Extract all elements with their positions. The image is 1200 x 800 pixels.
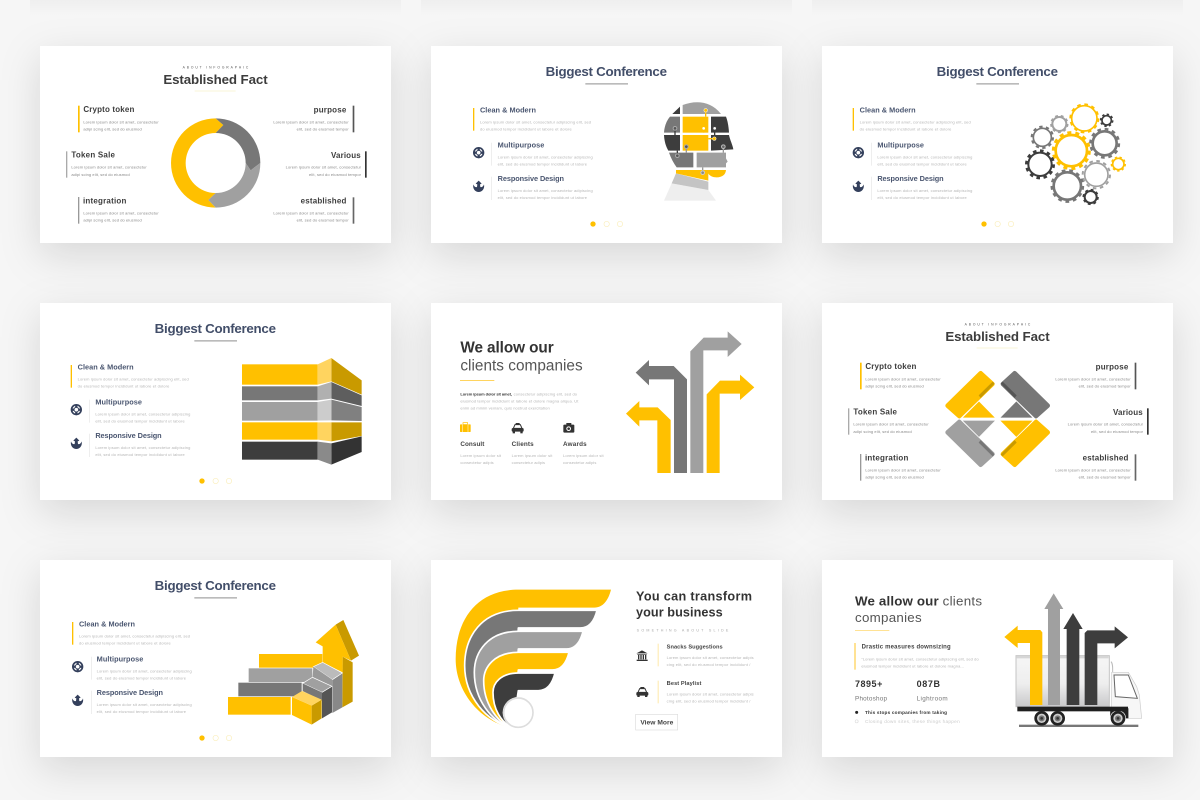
item: clean and modern: do eiusmod tempor incididunt ut labore et dolore (480, 127, 572, 132)
item: responsive design: Lorem ipsum dolor sit amet, consectetur adipiscing (95, 445, 190, 450)
icon: camera (563, 423, 574, 433)
item: token sale: Token Sale (71, 151, 116, 160)
item: various: elit, sed do eiusmod tempor (309, 172, 362, 177)
item: various (1068, 408, 1149, 435)
item: responsive design: Lorem ipsum dolor sit amet, consectetur adipiscing (97, 702, 192, 707)
item: established: established (1083, 454, 1128, 463)
icon: lifebuoy (73, 662, 83, 672)
icon: bank (636, 650, 648, 661)
item: token sale: Token Sale (853, 408, 898, 417)
item: awards (563, 441, 605, 465)
item: responsive design: elit, sed do eiusmod tempor incididunt ut labore (95, 452, 185, 457)
item: clean and modern: Clean & Modern (860, 106, 916, 115)
item: snacks suggestions: Lorem ipsum dolor sit amet, consectetur adipis (667, 655, 754, 660)
item: clients (512, 441, 553, 465)
item: established: elit, sed do eiusmod tempor (1079, 475, 1131, 480)
item: integration: Lorem ipsum dolor sit amet, consectetur (865, 468, 941, 473)
item: multipurpose: Multipurpose (97, 655, 143, 664)
wing graphic (456, 590, 611, 728)
pagination dots (199, 478, 232, 484)
item: crypto token: Crypto token (83, 105, 134, 114)
item: token sale: adipi scing elit, sed do eiusmod (853, 429, 912, 434)
item: integration: Lorem ipsum dolor sit amet, consectetur (83, 211, 159, 216)
item: consult: Lorem ipsum dolor sit (460, 453, 502, 458)
icon: lifebuoy (474, 148, 484, 158)
item: multipurpose: Lorem ipsum dolor sit amet, consectetur adipiscing (95, 412, 190, 417)
item: responsive design (491, 174, 593, 200)
item: integration: adipi scing elit, sed do eiusmod (865, 475, 924, 480)
item: clean and modern: Clean & Modern (480, 106, 537, 115)
panel: established fact donut (40, 46, 391, 243)
eyebrow label: ABOUT INFOGRAPHIC (965, 322, 1031, 326)
panel: clients companies truck (822, 560, 1173, 757)
item: crypto token: Lorem ipsum dolor sit amet, consectetur (83, 119, 159, 124)
heading: We allow our (855, 594, 939, 609)
item: responsive design: Lorem ipsum dolor sit amet, consectetur adipiscing (877, 188, 972, 193)
wing base circle (503, 697, 534, 728)
item: multipurpose: Multipurpose (498, 141, 544, 150)
stat: lightroom: 087B (917, 679, 940, 689)
item: responsive design: elit, sed do eiusmod tempor incididunt ut labore (877, 195, 967, 200)
item: token sale (848, 408, 929, 435)
item: clean and modern: Lorem ipsum dolor sit amet, consectetur adipiscing elit, sed (79, 633, 190, 638)
item: multipurpose: elit, sed do eiusmod tempor incididunt ut labore (95, 419, 185, 424)
heading (460, 340, 583, 374)
callout: drastic measures: eiusmod tempor incididunt ut labore et dolore magna... (861, 664, 964, 669)
panel: biggest conference gears (822, 46, 1173, 243)
item: clients: consectetur adipis (512, 460, 545, 465)
item: multipurpose (491, 141, 593, 167)
icon: rebel emblem (473, 181, 484, 192)
item: responsive design: Responsive Design (95, 431, 162, 440)
item: clean and modern (473, 106, 591, 132)
icon: lifebuoy (71, 405, 81, 415)
item: multipurpose: Lorem ipsum dolor sit amet, consectetur adipiscing (498, 155, 593, 160)
item: multipurpose: elit, sed do eiusmod tempor incididunt ut labore (498, 162, 588, 167)
item: purpose (1055, 362, 1136, 389)
donut chart (171, 118, 260, 208)
callout: drastic measures (854, 643, 979, 670)
item: multipurpose: Multipurpose (877, 141, 924, 150)
item: purpose: purpose (1096, 362, 1129, 371)
pagination dots (590, 221, 623, 227)
item: purpose: elit, sed do eiusmod tempor (1079, 384, 1131, 389)
intro paragraph: Lorem ipsum dolor sit amet, (460, 391, 512, 396)
pagination dots (199, 735, 232, 741)
item: various (286, 151, 367, 178)
panel: transform business wing (431, 560, 782, 757)
item: best playlist (658, 681, 754, 704)
item: token sale: Lorem ipsum dolor sit amet, consectetur (71, 165, 147, 170)
heading (636, 590, 752, 620)
item: clean and modern: do eiusmod tempor incididunt ut labore et dolore (79, 641, 171, 646)
item: multipurpose: Multipurpose (95, 398, 142, 407)
item: responsive design: Responsive Design (877, 174, 944, 183)
stat: lightroom (917, 679, 948, 702)
item: various: Various (331, 151, 361, 160)
item: clean and modern: do eiusmod tempor incididunt ut labore et dolore (860, 127, 952, 132)
item: crypto token: Crypto token (865, 362, 916, 371)
item: best playlist: cing elit, sed do eiusmod tempor incididunt / (667, 699, 751, 704)
item: crypto token: adipi scing elit, sed do eiusmod (83, 127, 142, 132)
icon: taxi (512, 423, 524, 433)
item: integration: adipi scing elit, sed do eiusmod (83, 218, 142, 223)
pagination dots (981, 221, 1014, 227)
icon: puzzle head (664, 102, 733, 201)
button: view more: View More (640, 719, 674, 726)
item: token sale: adipi scing elit, sed do eiusmod (71, 172, 130, 177)
item: multipurpose: elit, sed do eiusmod tempor incididunt ut labore (97, 676, 187, 681)
item: integration (78, 197, 159, 224)
item: various: Various (1113, 408, 1143, 417)
item: token sale: Lorem ipsum dolor sit amet, consectetur (853, 422, 929, 427)
heading: Established Fact (945, 329, 1050, 344)
item: purpose: elit, sed do eiusmod tempor (297, 127, 349, 132)
intro paragraph (460, 391, 579, 411)
item: responsive design: Responsive Design (498, 174, 565, 183)
item: clean and modern: Lorem ipsum dolor sit amet, consectetur adipiscing elit, sed (860, 119, 971, 124)
heading: clients companies (460, 357, 583, 374)
item: various: elit, sed do eiusmod tempor (1091, 429, 1144, 434)
stat: lightroom: Lightroom (917, 695, 948, 702)
item: responsive design: elit, sed do eiusmod tempor incididunt ut labore (97, 709, 187, 714)
item: token sale (66, 151, 147, 178)
panel: established fact diamond (822, 303, 1173, 500)
heading: Biggest Conference (155, 578, 276, 593)
item: snacks suggestions: Snacks Suggestions (667, 644, 723, 650)
item: snacks suggestions: cing elit, sed do eiusmod tempor incididunt / (667, 662, 751, 667)
item: established: elit, sed do eiusmod tempor (297, 218, 349, 223)
icon: rebel emblem (853, 181, 864, 192)
connectors (675, 110, 723, 173)
item: clean and modern: Lorem ipsum dolor sit amet, consectetur adipiscing elit, sed (480, 119, 591, 124)
panel: biggest conference stairs (40, 560, 391, 757)
item: best playlist: Lorem ipsum dolor sit amet, consectetur adipis (667, 692, 754, 697)
item: responsive design: Lorem ipsum dolor sit amet, consectetur adipiscing (498, 188, 593, 193)
icon: rebel emblem (72, 695, 83, 706)
item: established (273, 197, 354, 224)
item: multipurpose: elit, sed do eiusmod tempor incididunt ut labore (877, 162, 967, 167)
item: integration (860, 454, 941, 481)
item: crypto token (78, 105, 159, 132)
intro paragraph: eiusmod tempor incididunt ut labore et dolore magna aliqua. Ut (460, 399, 579, 404)
item: various: Lorem ipsum dolor sit amet, consectetur (286, 165, 362, 170)
subheading: SOMETHING ABOUT SLIDE (637, 629, 729, 633)
item: multipurpose (91, 655, 192, 681)
stat: photoshop (855, 679, 887, 702)
heading: We allow our (460, 340, 554, 357)
item: responsive design (89, 431, 190, 457)
3d layer stack (242, 358, 362, 465)
intro paragraph: consectetur adipiscing elit, sed do (514, 391, 578, 396)
callout: drastic measures: "Lorem ipsum dolor sit amet, consectetur adipiscing elit, sed do (861, 657, 979, 662)
item: awards: Lorem ipsum dolor sit (563, 453, 605, 458)
item: responsive design (91, 688, 192, 714)
heading: companies (855, 610, 922, 625)
eyebrow label: ABOUT INFOGRAPHIC (183, 65, 249, 69)
icon: briefcase (460, 423, 471, 432)
item: consult (460, 441, 502, 465)
item: clean and modern (853, 106, 971, 132)
item: multipurpose (871, 141, 972, 167)
diverging arrows (626, 331, 754, 473)
item: awards: consectetur adipis (563, 460, 596, 465)
item: clean and modern: Clean & Modern (78, 363, 134, 372)
item: purpose (273, 105, 354, 132)
item: awards: Awards (563, 441, 587, 448)
truck (1016, 656, 1142, 727)
heading: Biggest Conference (155, 321, 276, 336)
item: crypto token: Lorem ipsum dolor sit amet, consectetur (865, 376, 941, 381)
heading: Biggest Conference (546, 64, 667, 79)
item: responsive design: Responsive Design (97, 688, 164, 697)
item: clients: Clients (512, 441, 534, 448)
item: crypto token: adipi scing elit, sed do eiusmod (865, 384, 924, 389)
intro paragraph: enim ad minim veniam, quis nostrud exercitation (460, 406, 550, 411)
item: snacks suggestions (658, 644, 754, 667)
staircase arrow (228, 620, 359, 725)
item: purpose: Lorem ipsum dolor sit amet, consectetur (1055, 376, 1131, 381)
item: crypto token (860, 362, 941, 389)
icon: lifebuoy (853, 148, 863, 158)
diamond diagram (948, 373, 1048, 465)
item: clean and modern (72, 620, 190, 646)
heading (855, 594, 982, 625)
item: consult: consectetur adipis (460, 460, 494, 465)
item: responsive design (871, 174, 972, 200)
gears cluster (1026, 104, 1125, 204)
item: purpose: purpose (314, 105, 347, 114)
heading: clients (943, 594, 982, 609)
item: clients: Lorem ipsum dolor sit (512, 453, 553, 458)
item: multipurpose: Lorem ipsum dolor sit amet, consectetur adipiscing (97, 669, 192, 674)
stat: photoshop: 7895+ (855, 679, 882, 689)
heading: You can transform (636, 590, 752, 604)
panel: clients companies arrows (431, 303, 782, 500)
item: clean and modern: do eiusmod tempor incididunt ut labore et dolore (78, 384, 170, 389)
icon: rebel emblem (71, 438, 82, 449)
button: view more (636, 714, 678, 730)
item: integration: integration (83, 197, 126, 206)
heading: your business (636, 606, 723, 620)
item: multipurpose (89, 398, 190, 424)
bullet: second: Closing down sites, these things happen (865, 719, 960, 724)
stat: photoshop: Photoshop (855, 695, 887, 702)
item: established: Lorem ipsum dolor sit amet, consectetur (273, 211, 349, 216)
bullet: first: This stops companies from taking (865, 710, 947, 715)
item: various: Lorem ipsum dolor sit amet, consectetur (1068, 422, 1144, 427)
arrows on truck (1004, 593, 1128, 705)
item: multipurpose: Lorem ipsum dolor sit amet, consectetur adipiscing (877, 155, 972, 160)
item: purpose: Lorem ipsum dolor sit amet, consectetur (273, 119, 349, 124)
item: consult: Consult (460, 441, 485, 448)
item: integration: integration (865, 454, 908, 463)
panel: biggest conference stack (40, 303, 391, 500)
item: established: established (301, 197, 346, 206)
item: responsive design: elit, sed do eiusmod tempor incididunt ut labore (498, 195, 588, 200)
heading: Biggest Conference (937, 64, 1058, 79)
panel: biggest conference head (431, 46, 782, 243)
heading: Established Fact (163, 72, 268, 87)
item: clean and modern (71, 363, 189, 389)
item: clean and modern: Lorem ipsum dolor sit amet, consectetur adipiscing elit, sed (78, 376, 189, 381)
icon: taxi (636, 687, 648, 697)
item: established (1055, 454, 1136, 481)
item: established: Lorem ipsum dolor sit amet, consectetur (1055, 468, 1131, 473)
item: clean and modern: Clean & Modern (79, 620, 136, 629)
callout: drastic measures: Drastic measures downsizing (862, 644, 951, 650)
item: best playlist: Best Playlist (667, 681, 701, 687)
